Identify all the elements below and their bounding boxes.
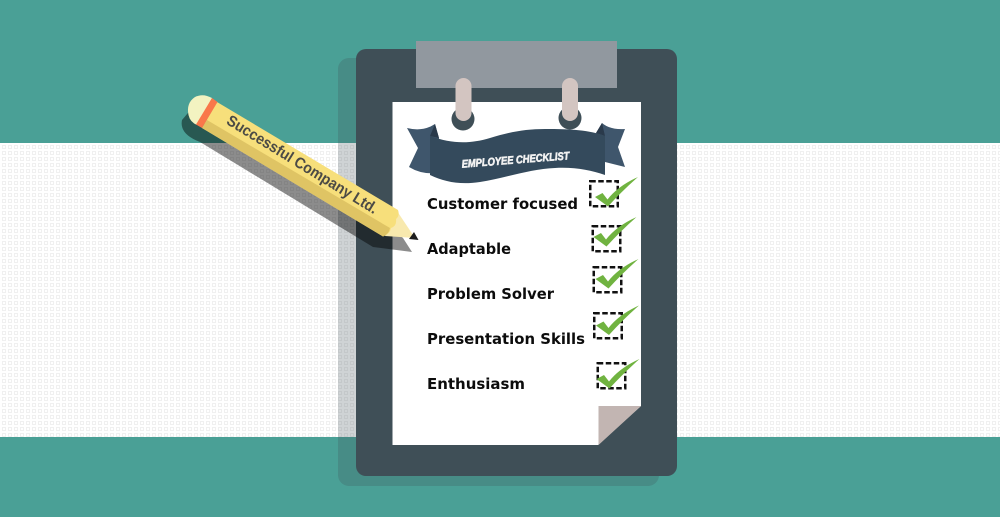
right ring	[558, 78, 582, 130]
background: patterned white band	[0, 143, 1000, 437]
ribbon right fold	[596, 123, 605, 136]
item 3: Problem Solver	[427, 285, 555, 303]
pencil graphite tip	[409, 232, 418, 240]
clip bar	[416, 41, 617, 88]
checkbox 4	[594, 306, 639, 338]
checkbox 1	[590, 177, 638, 206]
pencil eraser	[188, 95, 212, 125]
item 2: Adaptable	[427, 240, 511, 258]
left ring	[452, 78, 474, 130]
banner ribbon	[407, 123, 625, 183]
checkbox 2	[593, 217, 636, 251]
clipboard shadow	[338, 58, 659, 486]
checklist text	[427, 195, 585, 393]
checkbox 5	[596, 359, 640, 388]
pencil body	[202, 102, 399, 236]
ribbon right tail	[596, 123, 625, 167]
background: bottom teal band	[0, 437, 1000, 517]
checkbox 3	[594, 259, 638, 292]
paper sheet	[392, 102, 641, 445]
paper folded corner	[598, 406, 641, 445]
pencil orange band	[196, 98, 218, 128]
ribbon left fold	[430, 124, 439, 138]
item 5: Enthusiasm	[427, 375, 525, 393]
pencil label: Successful Company Ltd.	[223, 112, 381, 218]
item 4: Presentation Skills	[427, 330, 585, 348]
ribbon title: EMPLOYEE CHECKLIST	[461, 150, 571, 171]
ribbon body	[430, 129, 605, 183]
pencil	[188, 95, 418, 240]
pencil point wood	[385, 211, 415, 238]
ribbon left tail	[407, 124, 439, 173]
item 1: Customer focused	[427, 195, 578, 213]
clipboard board	[356, 49, 677, 476]
pencil shadow	[182, 107, 412, 252]
background: top teal band	[0, 0, 1000, 143]
pencil lower facet	[202, 120, 390, 236]
